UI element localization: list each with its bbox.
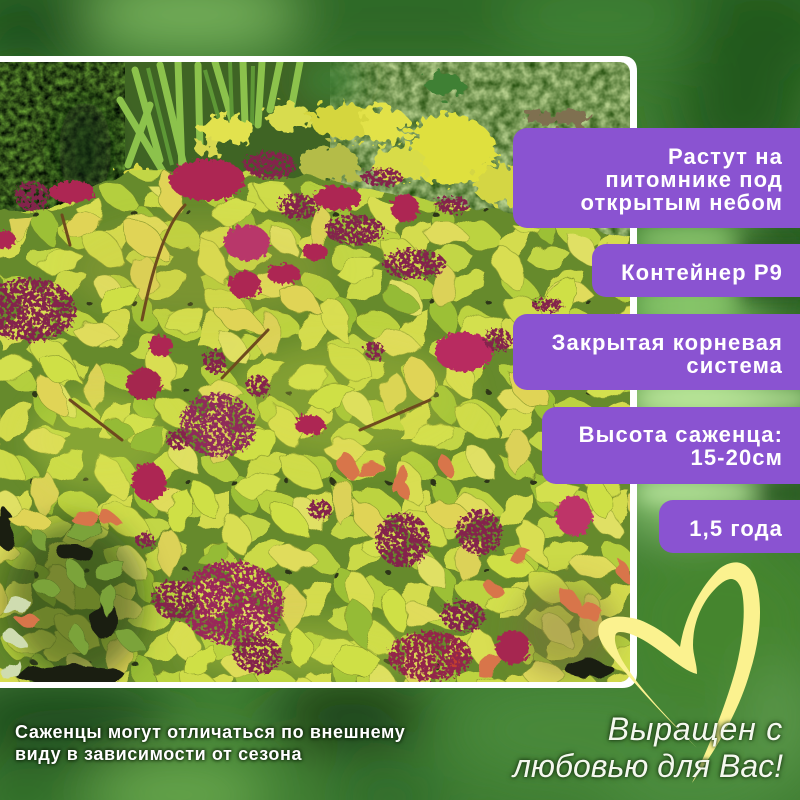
- info box: seedling height: [542, 407, 800, 484]
- photo card: flowering spirea bush: [0, 56, 637, 688]
- slogan: Выращен с: [608, 711, 783, 747]
- slogan: любовью для Вас!: [513, 748, 783, 784]
- sparse budding flower clusters: [0, 151, 564, 681]
- dense golden foliage: [0, 170, 650, 700]
- stems: [62, 205, 430, 440]
- pale yellow shrubs: [113, 68, 593, 209]
- info box: closed root system: Закрытая корневая: [552, 330, 783, 354]
- dense pink flower heads: [0, 159, 592, 664]
- variegated shrubs, top right: [330, 62, 630, 236]
- colour zones: [5, 220, 615, 680]
- slogan: [509, 711, 786, 784]
- info box: grown outdoors: [513, 128, 800, 228]
- white card frame: [0, 56, 637, 688]
- info box: closed root system: система: [686, 352, 783, 378]
- info box: seedling height: 15-20см: [691, 444, 783, 470]
- disclaimer note: виду в зависимости от сезона: [15, 744, 302, 764]
- info box: grown outdoors: Растут на: [668, 144, 783, 169]
- info box: grown outdoors: открытым небом: [580, 190, 783, 215]
- info box: container: Контейнер Р9: [621, 260, 783, 284]
- info box: container: [592, 244, 800, 297]
- disclaimer note: [13, 722, 407, 766]
- info box: grown outdoors: питомнике под: [605, 167, 783, 192]
- background garden behind the bush: [0, 62, 630, 236]
- disclaimer note: Саженцы могут отличаться по внешнему: [15, 722, 405, 742]
- info box: age: [659, 500, 800, 553]
- coral young leaves: [16, 447, 632, 682]
- dark conifer, top left: [0, 62, 125, 227]
- feature leaves: [10, 169, 628, 681]
- soil and shaded low leaves: [0, 510, 614, 684]
- info box: closed root system: [513, 314, 800, 390]
- info box: seedling height: Высота саженца:: [579, 422, 783, 446]
- info box: age: 1,5 года: [689, 516, 783, 540]
